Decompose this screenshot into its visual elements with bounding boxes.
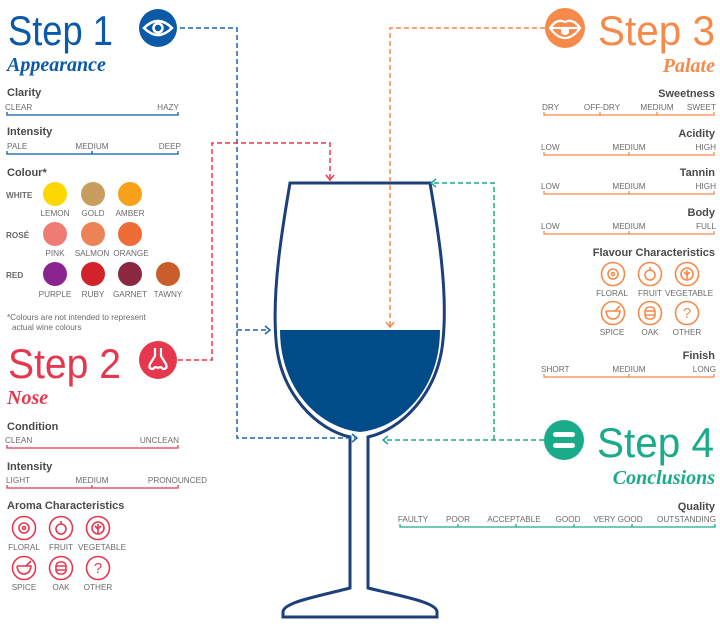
colour swatches: ROSÉ: [6, 230, 30, 240]
scale: sweetness: OFF-DRY: [584, 103, 621, 112]
wine: [280, 330, 440, 432]
subtitle: Appearance: Appearance: [5, 54, 106, 76]
flavour characteristics: FLORAL: [596, 289, 628, 298]
scale: acidity: HIGH: [696, 143, 716, 152]
scale: sweetness: Sweetness: [658, 88, 715, 100]
arrow: green connectors: [383, 179, 544, 444]
flavour characteristics: [593, 247, 715, 337]
colour swatches: PINK: [45, 249, 65, 258]
heading: Step 4: Step 4: [597, 419, 714, 466]
glass: [275, 183, 444, 617]
aroma characteristics: OTHER: [84, 583, 112, 592]
flavour characteristics: Flavour Characteristics: [593, 247, 715, 259]
flavour characteristics: OAK: [641, 328, 659, 337]
scale: body: FULL: [696, 222, 716, 231]
scale: condition: UNCLEAN: [140, 436, 179, 445]
scale: clarity: [5, 87, 180, 115]
icon: eye: [139, 9, 177, 47]
colour swatches: SALMON: [75, 249, 109, 258]
scale: intensity: LIGHT: [6, 476, 30, 485]
scale: tannin: Tannin: [680, 167, 715, 179]
scale: finish: MEDIUM: [612, 365, 646, 374]
colour swatches: GARNET: [113, 290, 147, 299]
scale: finish: [541, 350, 716, 377]
panel: step 2 nose: [5, 340, 207, 592]
arrow: orange connector: [386, 28, 545, 327]
flavour characteristics: VEGETABLE: [665, 289, 714, 298]
scale: tannin: LOW: [541, 182, 560, 191]
aroma characteristics: Aroma Characteristics: [7, 500, 124, 512]
colour swatches: RUBY: [82, 290, 105, 299]
panel: step 3 palate: [541, 7, 716, 377]
aroma characteristics: FRUIT: [49, 543, 73, 552]
scale: clarity: CLEAR: [5, 103, 32, 112]
scale: intensity: [7, 126, 182, 154]
flavour characteristics: FRUIT: [638, 289, 662, 298]
panel: step 1 appearance: [5, 7, 183, 332]
subtitle: Conclusions: Conclusions: [613, 467, 715, 489]
arrow: red connector: [178, 143, 334, 360]
colour swatches: LEMON: [40, 209, 70, 218]
aroma characteristics: FLORAL: [8, 543, 40, 552]
scale: quality: [398, 501, 716, 527]
note: *Colours are not intended to represent: [7, 313, 147, 322]
scale: acidity: [541, 128, 716, 155]
scale: intensity: Intensity: [7, 126, 53, 138]
aroma characteristics: [7, 500, 127, 592]
colour swatches: WHITE: [6, 191, 33, 200]
scale: tannin: MEDIUM: [612, 182, 646, 191]
colour swatches: TAWNY: [154, 290, 183, 299]
scale: sweetness: SWEET: [687, 103, 716, 112]
subtitle: Palate: Palate: [662, 55, 715, 77]
scale: condition: [5, 421, 179, 448]
colour swatches: Colour*: [7, 167, 47, 179]
colour swatches: RED: [6, 271, 23, 280]
scale: sweetness: DRY: [542, 103, 560, 112]
scale: quality: GOOD: [555, 515, 581, 524]
scale: finish: LONG: [693, 365, 716, 374]
scale: quality: Quality: [678, 501, 716, 513]
aroma characteristics: OAK: [52, 583, 70, 592]
icon: nose: [139, 341, 177, 379]
scale: intensity: [6, 461, 207, 488]
scale: intensity: Intensity: [7, 461, 53, 473]
scale: body: LOW: [541, 222, 560, 231]
note: actual wine colours: [12, 323, 82, 332]
scale: intensity: PALE: [7, 142, 28, 151]
aroma characteristics: VEGETABLE: [78, 543, 127, 552]
scale: clarity: Clarity: [7, 87, 42, 99]
colour swatches: GOLD: [81, 209, 105, 218]
heading: Step 3: Step 3: [598, 7, 715, 54]
flavour characteristics: OTHER: [673, 328, 701, 337]
scale: quality: VERY GOOD: [593, 515, 643, 524]
flavour characteristics: ?: [683, 305, 691, 322]
scale: intensity: MEDIUM: [75, 476, 109, 485]
heading: Step 2: Step 2: [8, 340, 121, 387]
arrow: blue connectors: [180, 28, 357, 442]
flavour characteristics: SPICE: [600, 328, 625, 337]
colour swatches: [6, 167, 183, 299]
scale: finish: SHORT: [541, 365, 570, 374]
scale: sweetness: [542, 88, 716, 115]
panel: step 4 conclusions: [398, 419, 716, 527]
scale: quality: FAULTY: [398, 515, 429, 524]
scale: tannin: [541, 167, 716, 194]
scale: condition: CLEAN: [5, 436, 32, 445]
scale: body: Body: [688, 207, 716, 219]
scale: acidity: LOW: [541, 143, 560, 152]
scale: intensity: MEDIUM: [75, 142, 109, 151]
heading: Step 1: Step 1: [8, 7, 113, 54]
subtitle: Nose: Nose: [6, 387, 48, 409]
scale: intensity: PRONOUNCED: [148, 476, 207, 485]
colour swatches: AMBER: [115, 209, 145, 218]
scale: body: MEDIUM: [612, 222, 646, 231]
colour swatches: ORANGE: [113, 249, 149, 258]
scale: acidity: Acidity: [678, 128, 716, 140]
aroma characteristics: ?: [94, 560, 102, 577]
scale: clarity: HAZY: [157, 103, 180, 112]
scale: sweetness: MEDIUM: [640, 103, 674, 112]
scale: quality: POOR: [446, 515, 470, 524]
scale: intensity: DEEP: [159, 142, 182, 151]
scale: quality: ACCEPTABLE: [487, 515, 541, 524]
scale: tannin: HIGH: [696, 182, 716, 191]
scale: finish: Finish: [683, 350, 715, 362]
aroma characteristics: SPICE: [12, 583, 37, 592]
scale: body: [541, 207, 716, 234]
colour swatches: PURPLE: [39, 290, 72, 299]
scale: acidity: MEDIUM: [612, 143, 646, 152]
icon: mouth: [545, 8, 585, 48]
scale: quality: OUTSTANDING: [657, 515, 716, 524]
icon: equals: [544, 420, 584, 460]
scale: condition: Condition: [7, 421, 59, 433]
